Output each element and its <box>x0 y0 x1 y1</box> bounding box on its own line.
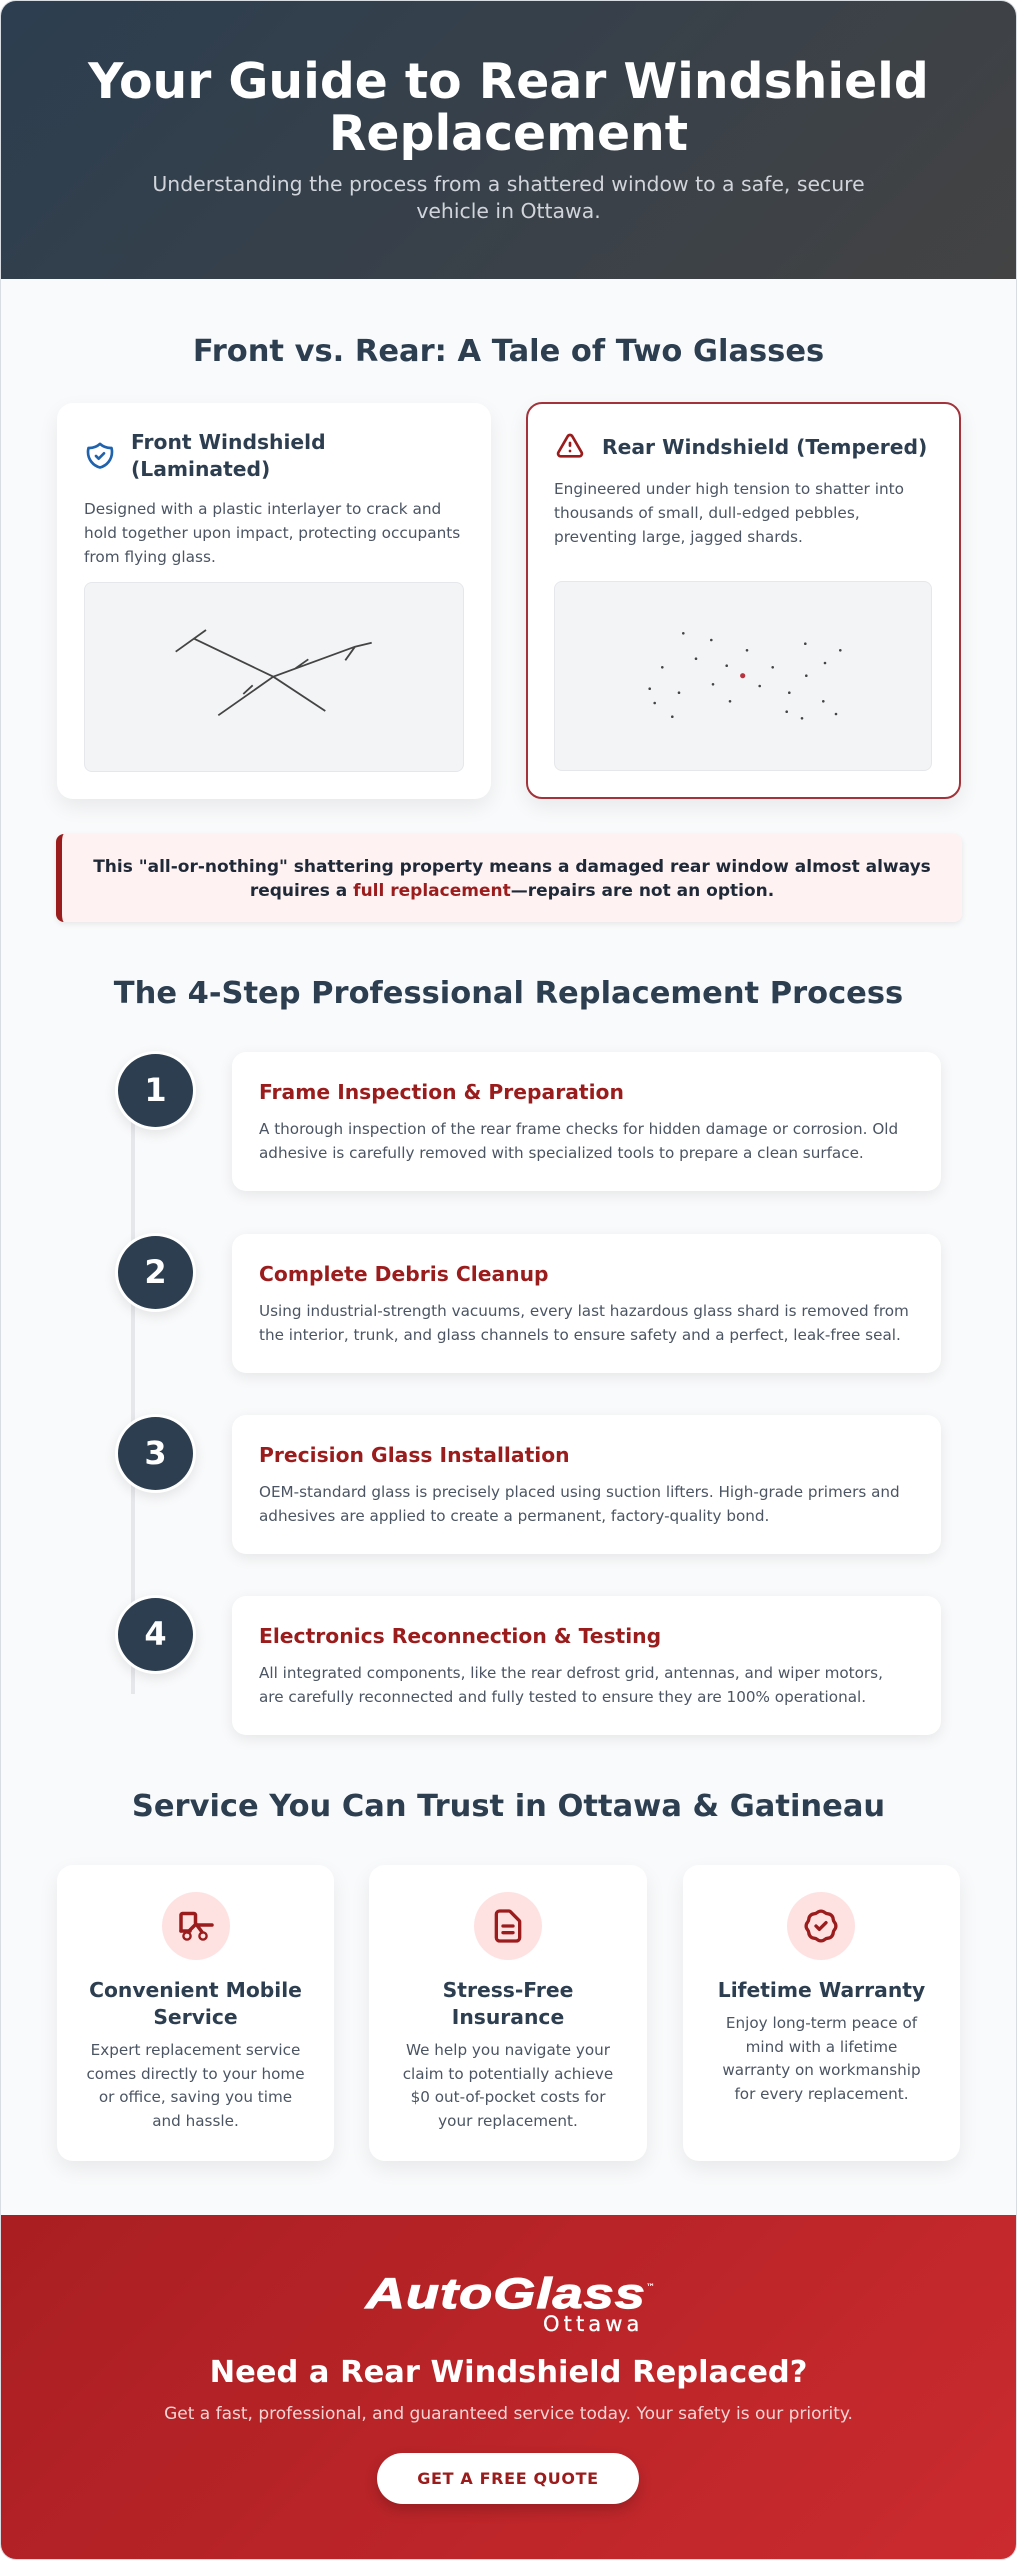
insurance title <box>443 1978 573 2028</box>
callout text: This "all-or-nothing" shattering property means a damaged rear window almost always <box>93 857 931 877</box>
rear card title: Rear Windshield (Tempered) <box>602 435 927 459</box>
callout text <box>93 857 931 901</box>
step 3 title: Precision Glass Installation <box>259 1443 570 1467</box>
step 1 card <box>232 1052 941 1191</box>
timeline line <box>131 1100 135 1694</box>
mobile service text: or office, saving you time <box>99 2088 292 2106</box>
footer call to action <box>1 2215 1016 2559</box>
step 4 number <box>115 1595 196 1674</box>
step 1 text: adhesive is carefully removed with specialized tools to prepare a clean surface. <box>259 1144 864 1162</box>
step 1 text <box>259 1120 898 1162</box>
insurance text: your replacement. <box>438 2112 578 2130</box>
front card title: Front Windshield <box>131 430 326 454</box>
heading: trust: Service You Can Trust in Ottawa & Gatineau <box>132 1789 885 1824</box>
subtitle <box>152 172 865 223</box>
front card description <box>84 500 460 566</box>
mobile service title: Service <box>153 2004 238 2028</box>
rear card description: Engineered under high tension to shatter into <box>554 480 904 498</box>
step 3 text: OEM-standard glass is precisely placed using suction lifters. High-grade primers and <box>259 1483 900 1501</box>
subtitle: Understanding the process from a shattered window to a safe, secure <box>152 172 865 196</box>
icon: document <box>474 1892 542 1960</box>
step 2 number <box>115 1233 196 1312</box>
front card title <box>131 430 326 481</box>
insurance title: Insurance <box>452 2004 564 2028</box>
title: Your Guide to Rear Windshield <box>88 53 929 110</box>
front card description: from flying glass. <box>84 548 216 566</box>
step 4 text <box>259 1664 883 1706</box>
mobile service title: Convenient Mobile <box>89 1978 302 2002</box>
mobile service text: Expert replacement service <box>91 2041 300 2059</box>
panel: front windshield <box>57 403 491 799</box>
CTA text: Get a fast, professional, and guaranteed service today. Your safety is our priority. <box>164 2404 853 2424</box>
step 3 number <box>115 1414 196 1493</box>
step 4 text: All integrated components, like the rear defrost grid, antennas, and wiper motors, <box>259 1664 883 1682</box>
step 2 card <box>232 1234 941 1372</box>
step 4 card <box>232 1596 941 1735</box>
step 4 number: 4 <box>144 1615 167 1653</box>
front card description: hold together upon impact, protecting occupants <box>84 524 460 542</box>
step 3 number: 3 <box>144 1434 167 1472</box>
panel: warranty <box>683 1865 960 2161</box>
heading: front vs rear: Front vs. Rear: A Tale of Two Glasses <box>193 334 824 369</box>
mobile service text: and hassle. <box>152 2112 239 2130</box>
warranty text <box>722 2014 921 2103</box>
step 2 number: 2 <box>144 1253 167 1291</box>
warranty text: warranty on workmanship <box>722 2061 921 2079</box>
step 2 title: Complete Debris Cleanup <box>259 1262 549 1286</box>
icon: badge check <box>787 1892 855 1960</box>
insurance title: Stress-Free <box>443 1978 573 2002</box>
step 3 text <box>259 1483 900 1525</box>
mobile service text <box>86 2041 305 2130</box>
title: Replacement <box>329 105 688 162</box>
CTA button: GET A FREE QUOTE <box>417 2469 599 2488</box>
step 1 number: 1 <box>144 1071 167 1109</box>
warranty text: Enjoy long-term peace of <box>726 2014 917 2032</box>
CTA button <box>377 2453 639 2504</box>
panel: rear windshield <box>526 402 961 799</box>
logo trademark: ™ <box>646 2283 655 2293</box>
warranty text: for every replacement. <box>734 2085 909 2103</box>
insurance text: $0 out-of-pocket costs for <box>411 2088 605 2106</box>
front card description: Designed with a plastic interlayer to crack and <box>84 500 441 518</box>
panel: mobile service <box>57 1865 334 2161</box>
insurance text: claim to potentially achieve <box>403 2065 613 2083</box>
header banner <box>1 1 1016 279</box>
callout text: requires a full replacement—repairs are not an option. <box>250 881 774 901</box>
insurance text: We help you navigate your <box>406 2041 610 2059</box>
icon: mobile truck <box>162 1892 230 1960</box>
step 1 title: Frame Inspection & Preparation <box>259 1080 624 1104</box>
step 4 text: are carefully reconnected and fully tested to ensure they are 100% operational. <box>259 1688 866 1706</box>
rear card description <box>554 480 904 546</box>
insurance text <box>403 2041 613 2130</box>
heading: process: The 4-Step Professional Replacement Process <box>114 976 903 1011</box>
step 1 text: A thorough inspection of the rear frame checks for hidden damage or corrosion. Old <box>259 1120 898 1138</box>
title <box>88 53 929 162</box>
illustration: laminated crack pattern <box>84 582 464 772</box>
step 2 text: Using industrial-strength vacuums, every last hazardous glass shard is removed from <box>259 1302 909 1320</box>
logo location: Ottawa <box>543 2312 644 2336</box>
logo wordmark: AutoGlass <box>366 2270 646 2318</box>
panel: insurance <box>369 1865 647 2161</box>
mobile service title <box>89 1978 302 2028</box>
step 3 text: adhesives are applied to create a permanent, factory-quality bond. <box>259 1507 769 1525</box>
CTA heading: Need a Rear Windshield Replaced? <box>210 2355 807 2390</box>
step 2 text: the interior, trunk, and glass channels to ensure safety and a perfect, leak-free seal. <box>259 1326 901 1344</box>
warranty text: mind with a lifetime <box>746 2038 897 2056</box>
step 1 number <box>115 1051 196 1130</box>
mobile service text: comes directly to your home <box>86 2065 305 2083</box>
step 4 title: Electronics Reconnection & Testing <box>259 1624 661 1648</box>
callout: full replacement <box>56 834 962 922</box>
logo <box>364 2270 655 2336</box>
step 2 text <box>259 1302 909 1344</box>
rear card description: thousands of small, dull-edged pebbles, <box>554 504 860 522</box>
illustration: tempered pebble pattern <box>554 581 932 771</box>
front card title: (Laminated) <box>131 457 270 481</box>
rear card description: preventing large, jagged shards. <box>554 528 803 546</box>
step 3 card <box>232 1415 941 1554</box>
icon: warning triangle <box>556 434 584 458</box>
icon: shield check <box>86 442 114 469</box>
subtitle: vehicle in Ottawa. <box>416 199 601 223</box>
warranty title: Lifetime Warranty <box>718 1978 925 2002</box>
